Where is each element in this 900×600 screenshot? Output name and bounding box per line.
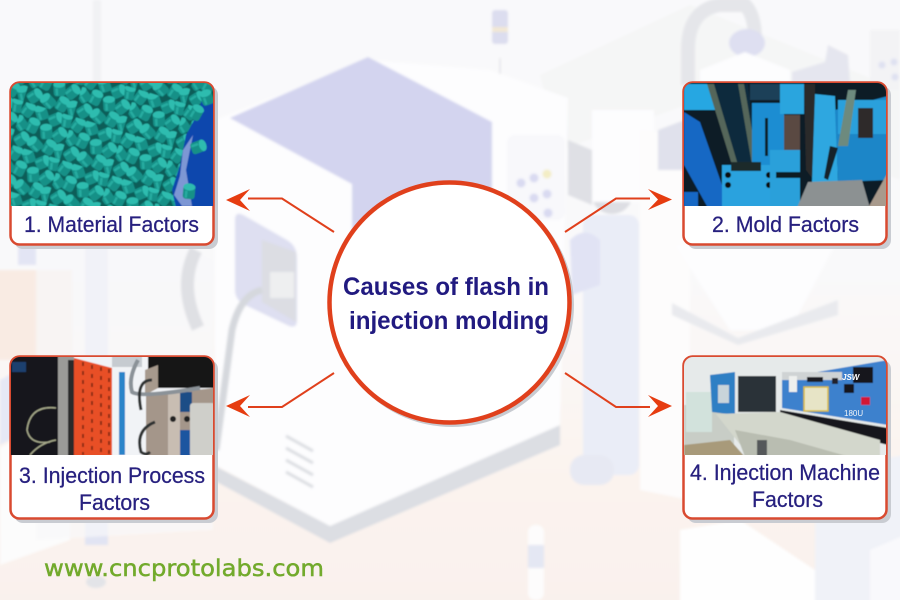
lower lamp [528, 525, 544, 600]
operator figure [568, 110, 654, 485]
arrow: to injection machine factors [565, 373, 672, 417]
panel: 4. Injection Machine Factors [682, 355, 891, 523]
panel: 3. Injection Process Factors [9, 355, 218, 523]
title [343, 273, 549, 335]
machine body [215, 60, 568, 526]
label: 3. Injection Process [19, 463, 205, 488]
vent grille [286, 436, 313, 487]
power cable [216, 290, 262, 450]
label [690, 460, 880, 512]
label: 1. Material Factors [24, 212, 199, 237]
control panel [507, 135, 565, 220]
photo: mold in machine [9, 355, 215, 457]
photo: green plastic pellets [8, 80, 216, 208]
label: 2. Mold Factors [712, 212, 859, 237]
title: Causes of flash in [343, 273, 549, 301]
arrow: to mold factors [565, 189, 672, 232]
arrow: to injection process factors [226, 373, 334, 417]
machine brand marks: JSW [842, 373, 861, 382]
title: injection molding [349, 307, 549, 335]
machine brand marks: 180U [844, 409, 863, 418]
label: 4. Injection Machine [690, 460, 880, 485]
label [19, 463, 205, 515]
central circle: causes of flash in injection molding [330, 182, 574, 427]
machine brand marks [842, 373, 863, 418]
arrow: to material factors [226, 189, 334, 232]
label: Factors [752, 487, 823, 512]
signal lamp [492, 10, 508, 74]
rear machine [640, 5, 900, 600]
website address: www.cncprotolabs.com [44, 554, 324, 582]
machine window [235, 214, 297, 327]
photo: blue mold assembly [682, 81, 888, 208]
machine shadow [213, 425, 560, 543]
photo: JSW injection machine [682, 355, 888, 457]
machine roof [230, 57, 492, 240]
label: Factors [79, 490, 150, 515]
panel: 1. Material Factors [8, 80, 218, 249]
panel: 2. Mold Factors [682, 81, 891, 249]
